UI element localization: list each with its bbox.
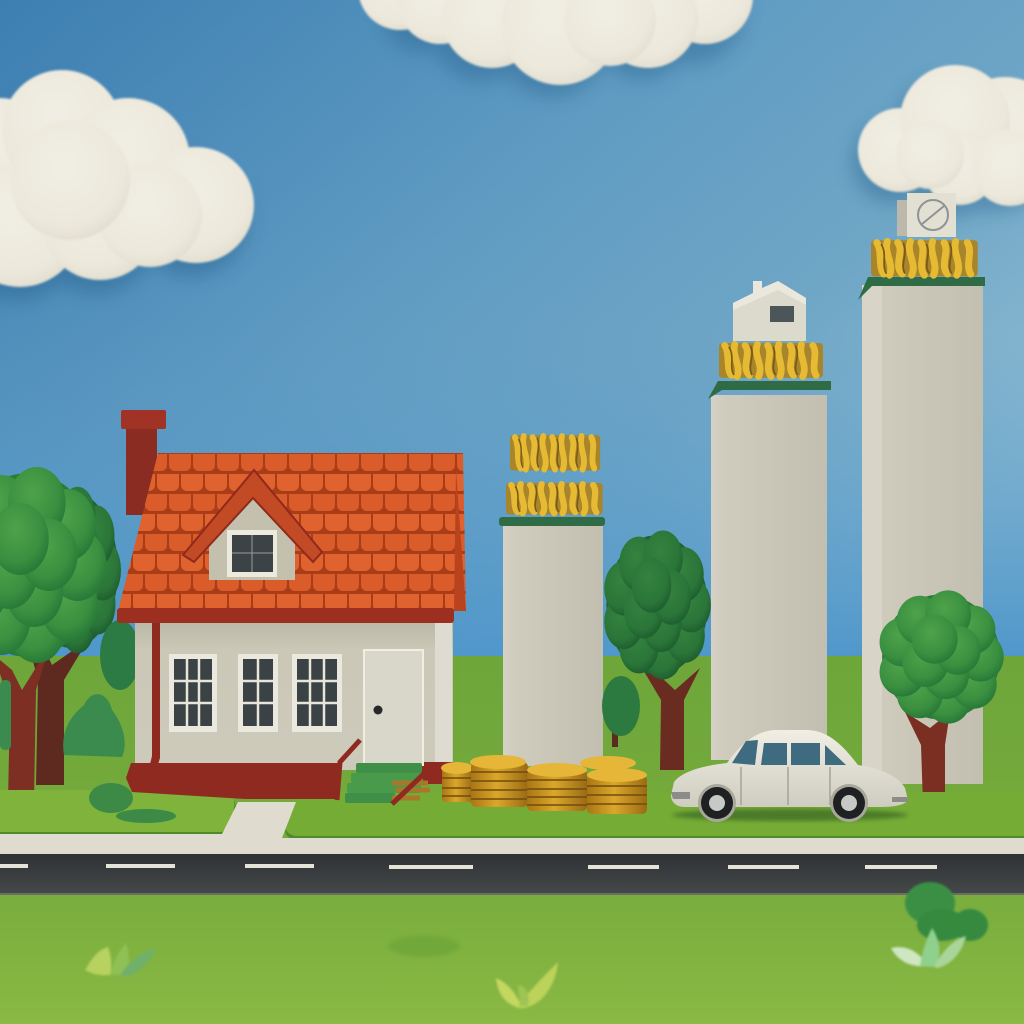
foreground lawn xyxy=(0,895,1024,1024)
sky background xyxy=(0,0,1024,660)
road xyxy=(0,854,1024,896)
plant: left tuft xyxy=(85,943,156,976)
house: dormer xyxy=(183,470,322,580)
coin stack 4 xyxy=(580,756,647,814)
garden bushes xyxy=(89,783,176,823)
road markings xyxy=(0,864,937,869)
coin stack 1 xyxy=(441,762,473,802)
sidewalk xyxy=(0,802,1024,856)
car: rear wheel xyxy=(830,784,868,822)
gold bundles: pillar 2 xyxy=(719,343,823,378)
front lawn: right xyxy=(285,792,1024,840)
gold bundles: pillar 1 xyxy=(506,435,603,514)
plant: centre tuft xyxy=(496,962,558,1008)
small shrub: behind pillars xyxy=(602,676,640,747)
plant: middle blur patch xyxy=(388,935,460,957)
house: steps xyxy=(337,740,430,804)
house: chimney xyxy=(121,410,166,515)
small box on pillar 3 xyxy=(897,193,956,237)
tree: right foreground xyxy=(880,590,1004,805)
car: body xyxy=(671,730,908,807)
house: foundation xyxy=(126,763,340,799)
back grass field xyxy=(0,656,1024,841)
foreground plants xyxy=(85,882,988,1008)
car: bumpers xyxy=(671,792,908,802)
pillar 2 xyxy=(708,381,831,760)
house: body wall xyxy=(135,620,453,770)
tree: left foreground xyxy=(0,467,106,802)
house: door xyxy=(364,650,423,765)
gold bundles: pillar 3 xyxy=(871,240,978,276)
car: windows xyxy=(732,740,846,765)
coin stack 2 xyxy=(470,755,528,807)
house: window middle xyxy=(238,654,278,732)
bushes: left of house xyxy=(0,680,125,757)
tree: left rear xyxy=(24,487,140,785)
house: downpipe xyxy=(143,618,160,792)
plant: right tuft xyxy=(891,928,966,968)
tree: behind pillars xyxy=(604,531,711,770)
pillar 3: tallest xyxy=(858,277,985,784)
house: window right xyxy=(292,654,342,732)
small house on pillar 2 xyxy=(733,281,806,341)
front lawn: left xyxy=(0,790,236,836)
house: roof xyxy=(117,453,466,623)
cloud: right xyxy=(852,65,1024,217)
cloud: top centre xyxy=(358,0,753,97)
house: window left xyxy=(169,654,217,732)
coin stack 3 xyxy=(527,763,587,811)
house xyxy=(117,410,466,804)
cloud: left xyxy=(0,70,254,301)
coin stacks xyxy=(441,755,647,814)
car: front wheel xyxy=(698,784,736,822)
pillar 1: shortest xyxy=(499,517,605,766)
car xyxy=(671,730,908,822)
plant: right bushes xyxy=(905,882,988,941)
